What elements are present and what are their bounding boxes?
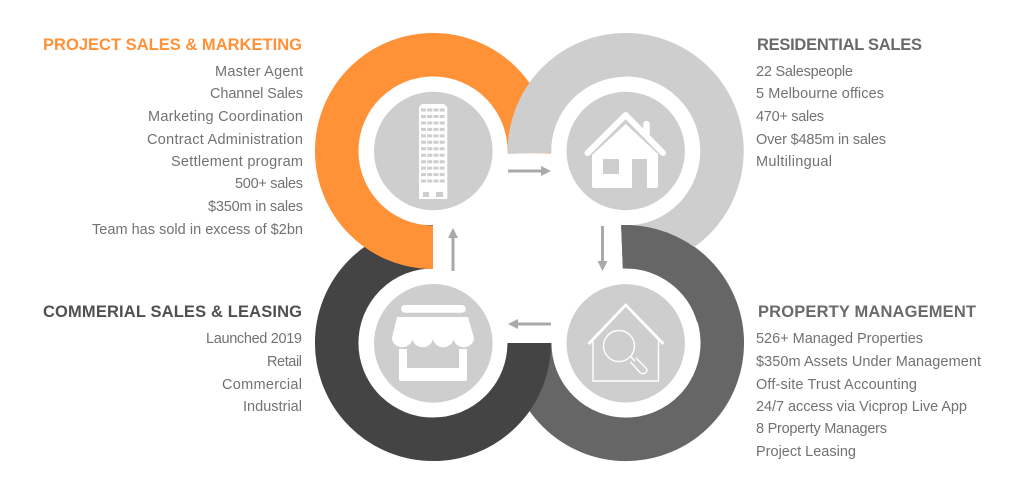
text block: project sales and marketing: 500+ sales xyxy=(235,176,303,192)
text block: property management: 8 Property Managers xyxy=(756,421,887,437)
text block: commercial sales and leasing: Launched 2019 xyxy=(206,331,302,347)
text block: commercial sales and leasing: Industrial xyxy=(243,399,302,415)
text block: residential sales: Over $485m in sales xyxy=(756,132,886,148)
text block: project sales and marketing: Settlement program xyxy=(171,154,303,170)
arrow: right xyxy=(508,166,551,176)
arrow: left xyxy=(508,319,551,329)
text block: property management: Project Leasing xyxy=(756,444,856,460)
text block: residential sales: 470+ sales xyxy=(756,109,824,125)
disc and icon: house with magnifier xyxy=(566,284,685,402)
ring: light grey residential xyxy=(529,55,722,247)
arrow: up xyxy=(448,228,458,271)
heading: project sales: PROJECT SALES & MARKETING xyxy=(43,36,302,54)
text block: commercial sales and leasing xyxy=(43,303,302,415)
ring: light grey residential overlap xyxy=(529,55,626,153)
text block: commercial sales and leasing: Commercial xyxy=(222,377,302,393)
heading: property management: PROPERTY MANAGEMENT xyxy=(758,303,976,321)
ring: charcoal commercial xyxy=(337,247,529,439)
text block: project sales and marketing: Channel Sales xyxy=(210,86,303,102)
heading: residential sales: RESIDENTIAL SALES xyxy=(757,36,922,54)
text block: property management xyxy=(756,303,981,460)
text block: project sales and marketing: Master Agent xyxy=(215,64,303,80)
ring: dark grey property management xyxy=(530,247,722,439)
text block: property management: Off-site Trust Accounting xyxy=(756,377,917,393)
text block: residential sales xyxy=(756,36,922,170)
text block: residential sales: Multilingual xyxy=(756,154,832,170)
text block: project sales and marketing: Marketing Coordination xyxy=(148,109,303,125)
arrow: down xyxy=(598,226,608,271)
disc and icon: shop front xyxy=(374,284,493,403)
text block: property management: 526+ Managed Properties xyxy=(756,331,923,347)
text block: property management: $350m Assets Under Management xyxy=(756,354,981,370)
ring: charcoal commercial overlap xyxy=(433,343,529,439)
text block: project sales and marketing: Contract Administration xyxy=(147,132,303,148)
disc and icon: house xyxy=(566,92,685,210)
disc and icon: tower building xyxy=(374,92,493,210)
text block: project sales and marketing: Team has sold in excess of $2bn xyxy=(92,222,303,238)
text block: commercial sales and leasing: Retail xyxy=(267,354,302,370)
text block: project sales and marketing: $350m in sales xyxy=(208,199,303,215)
ring: orange project sales xyxy=(337,55,529,247)
heading: commercial sales: COMMERIAL SALES & LEASING xyxy=(43,303,302,321)
text block: residential sales: 5 Melbourne offices xyxy=(756,86,884,102)
text block: property management: 24/7 access via Vicprop Live App xyxy=(756,399,967,415)
text block: residential sales: 22 Salespeople xyxy=(756,64,853,80)
ring: dark grey property management overlap xyxy=(622,247,718,316)
text block: project sales and marketing xyxy=(43,36,303,238)
